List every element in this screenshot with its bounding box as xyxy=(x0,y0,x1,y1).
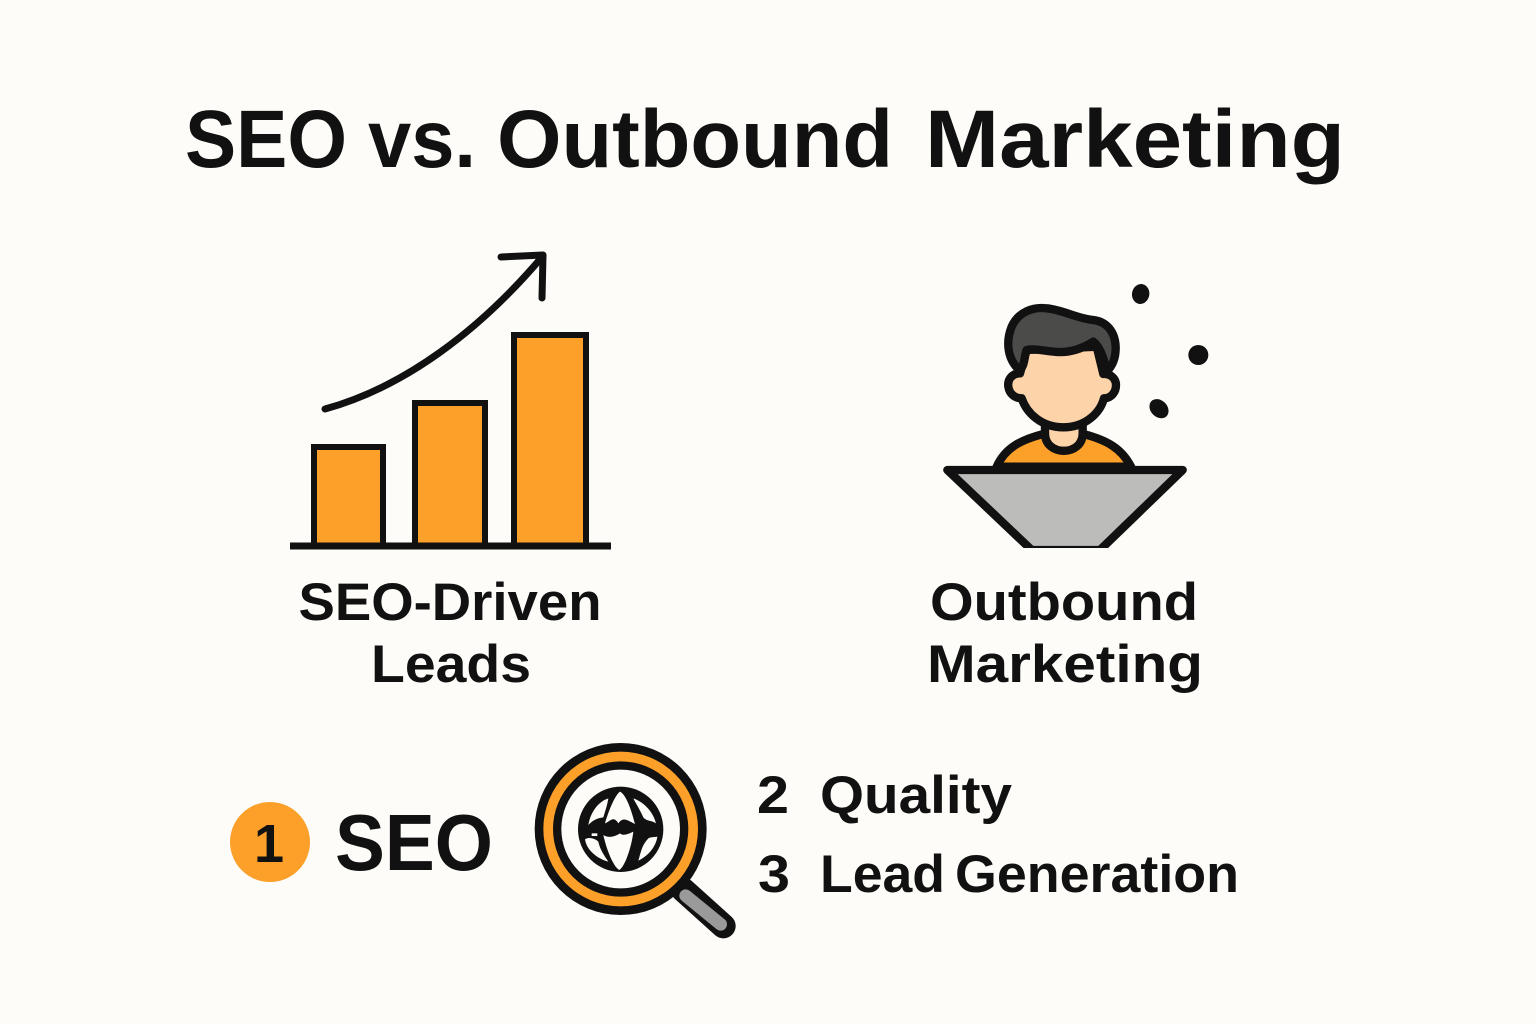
neck xyxy=(1045,423,1083,451)
bar 3 xyxy=(514,335,586,546)
dots xyxy=(1130,283,1208,422)
shirt xyxy=(997,434,1131,467)
list item: 3 Lead Generation: 3 xyxy=(758,845,790,904)
bar 1 xyxy=(314,447,383,546)
list item: 3 Lead Generation: Lead xyxy=(820,845,945,904)
head xyxy=(1008,347,1116,427)
handle grip xyxy=(686,896,721,924)
title: Outbound xyxy=(497,94,893,185)
label: SEO-Driven Leads: SEO-Driven xyxy=(298,573,602,632)
badge: number 1 xyxy=(230,802,310,882)
icon: person behind outbound funnel xyxy=(947,283,1208,558)
list item: 2 Quality: Quality xyxy=(820,766,1013,825)
label: Outbound Marketing: Marketing xyxy=(927,635,1203,694)
title: SEO xyxy=(185,94,347,185)
icon: SEO bar chart with rising arrow xyxy=(290,255,611,546)
title xyxy=(185,94,1345,185)
hair xyxy=(1008,308,1116,372)
title: Marketing xyxy=(925,94,1345,185)
list item: 3 Lead Generation: Generation xyxy=(955,845,1239,904)
label: SEO-Driven Leads: Leads xyxy=(371,635,531,694)
label: SEO: SEO xyxy=(335,798,493,887)
globe xyxy=(578,787,663,872)
bar 2 xyxy=(415,403,485,546)
chart baseline xyxy=(290,542,611,550)
icon: magnifying glass with globe xyxy=(535,743,723,926)
label: SEO-Driven Leads xyxy=(298,573,602,694)
lens ring xyxy=(535,743,707,915)
title: vs. xyxy=(368,94,476,185)
handle outline xyxy=(683,890,723,926)
label: Outbound Marketing: Outbound xyxy=(930,573,1198,632)
funnel xyxy=(947,470,1183,550)
badge: number 1: 1 xyxy=(254,814,284,874)
growth arrow xyxy=(325,255,543,409)
label: Outbound Marketing xyxy=(927,573,1203,694)
list item: 2 Quality: 2 xyxy=(757,766,789,825)
list item: 3 Lead Generation xyxy=(758,845,1239,904)
funnel bottom edge cover xyxy=(1017,548,1117,558)
